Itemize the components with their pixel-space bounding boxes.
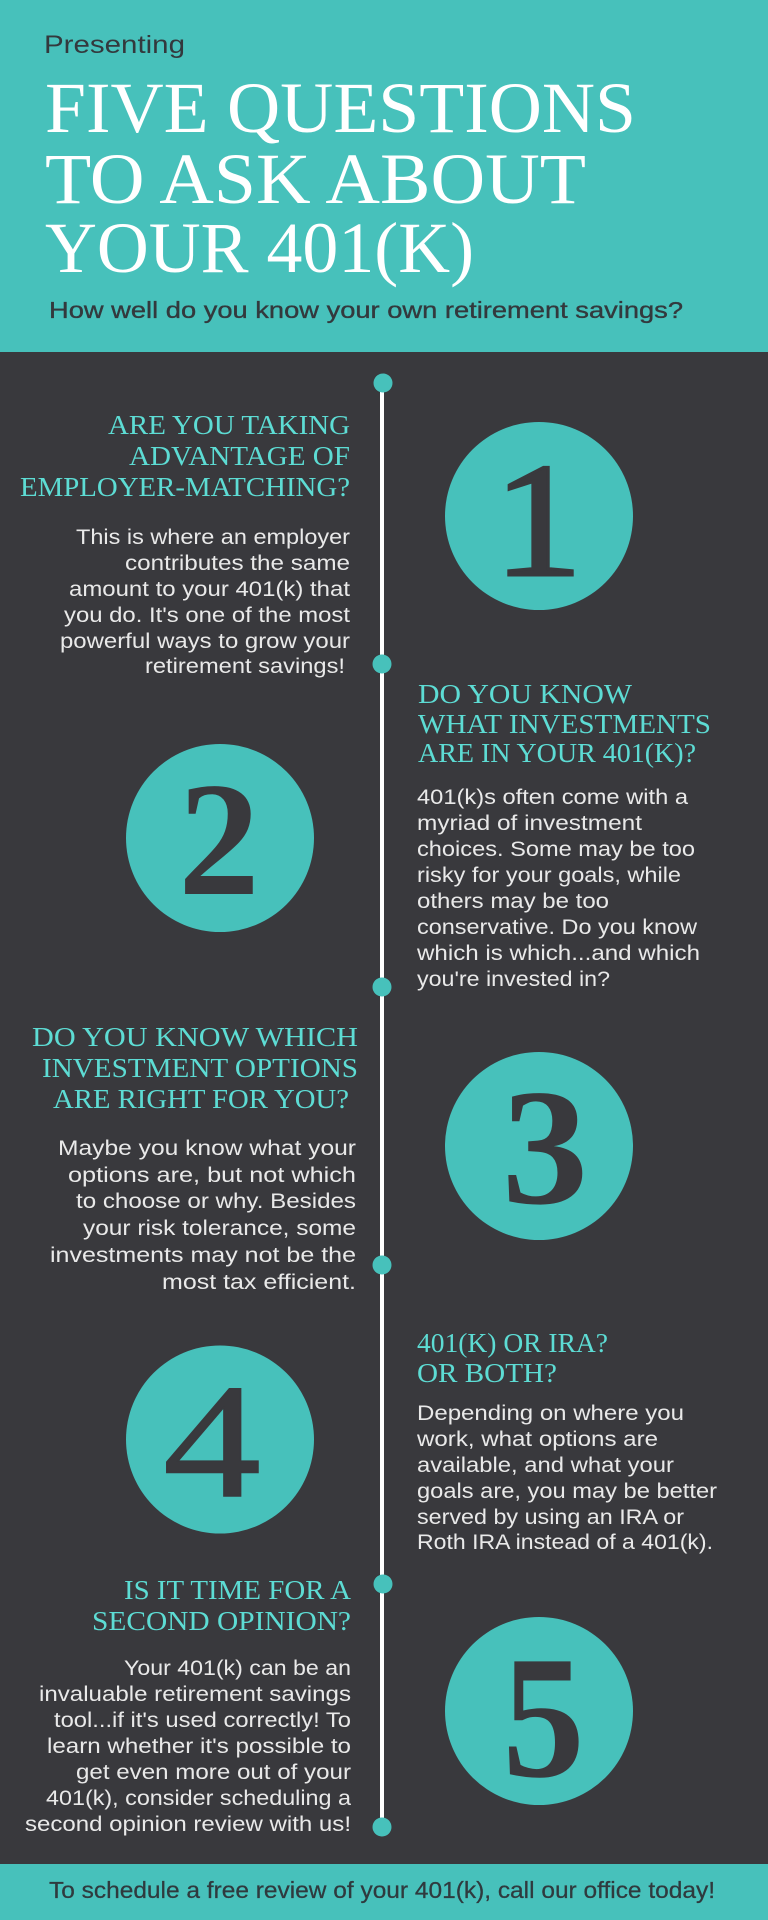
title: FIVE QUESTIONS bbox=[45, 68, 636, 148]
body text: question 4: served by using an IRA or bbox=[417, 1506, 684, 1529]
body text: question 3: investments may not be the bbox=[50, 1244, 356, 1267]
heading: question 1: EMPLOYER-MATCHING? bbox=[20, 472, 350, 502]
body text: question 3 bbox=[50, 1137, 356, 1294]
number badge 1 bbox=[445, 422, 633, 611]
body text: question 2: you're invested in? bbox=[417, 968, 610, 991]
timeline with dots bbox=[372, 374, 392, 1836]
title: TO ASK ABOUT bbox=[45, 139, 586, 219]
number badge 4: 4 bbox=[163, 1351, 261, 1531]
number badge 3: 3 bbox=[502, 1055, 588, 1239]
heading: question 2: DO YOU KNOW bbox=[418, 679, 633, 709]
title: YOUR 401(K) bbox=[45, 208, 474, 288]
body text: question 4: Depending on where you bbox=[417, 1402, 684, 1425]
body text: question 3: most tax efficient. bbox=[162, 1271, 356, 1294]
body text: question 5: get even more out of your bbox=[76, 1761, 351, 1784]
panel: question 5 bbox=[25, 1575, 633, 1836]
heading: question 4 bbox=[417, 1328, 608, 1388]
body text: question 4 bbox=[416, 1402, 717, 1554]
body text: question 2: which is which...and which bbox=[416, 942, 700, 965]
body text: question 4: available, and what your bbox=[417, 1454, 674, 1477]
body text: question 2: 401(k)s often come with a bbox=[417, 786, 688, 809]
body text: question 4: Roth IRA instead of a 401(k). bbox=[417, 1531, 713, 1554]
body text: question 4: work, what options are bbox=[416, 1428, 658, 1451]
panel: footer call to action: To schedule a free review of your 401(k), call our office today! bbox=[49, 1877, 715, 1903]
body text: question 3: your risk tolerance, some bbox=[83, 1217, 356, 1240]
body text: question 1: you do. It's one of the most bbox=[64, 604, 350, 627]
number badge 1: 1 bbox=[493, 430, 583, 611]
heading: question 1: ARE YOU TAKING bbox=[108, 410, 350, 440]
body text: question 1 bbox=[60, 526, 350, 678]
heading: question 3: INVESTMENT OPTIONS bbox=[42, 1053, 358, 1083]
heading: question 1 bbox=[20, 410, 350, 502]
body text: question 3: Maybe you know what your bbox=[58, 1137, 356, 1160]
body text: question 2 bbox=[416, 786, 700, 991]
heading: question 3 bbox=[32, 1022, 358, 1114]
body text: question 5 bbox=[25, 1657, 351, 1836]
heading: question 5: IS IT TIME FOR A bbox=[124, 1575, 352, 1605]
number badge 2: 2 bbox=[178, 750, 260, 930]
panel: question 4 bbox=[126, 1328, 717, 1554]
heading: question 3: DO YOU KNOW WHICH bbox=[32, 1022, 358, 1052]
heading: question 3: ARE RIGHT FOR YOU? bbox=[53, 1084, 349, 1114]
body text: question 5: invaluable retirement savings bbox=[39, 1683, 351, 1706]
body text: question 2: conservative. Do you know bbox=[417, 916, 698, 939]
body text: question 2: risky for your goals, while bbox=[417, 864, 681, 887]
body text: question 1: powerful ways to grow your bbox=[60, 630, 350, 653]
body text: question 2: others may be too bbox=[417, 890, 609, 913]
number badge 3 bbox=[445, 1052, 633, 1240]
body text: question 2: choices. Some may be too bbox=[417, 838, 695, 861]
body text: question 2: myriad of investment bbox=[417, 812, 642, 835]
body text: question 5: second opinion review with us! bbox=[25, 1813, 351, 1836]
subtitle: How well do you know your own retirement savings? bbox=[49, 297, 683, 323]
body text: question 5: 401(k), consider scheduling a bbox=[46, 1787, 351, 1810]
heading: question 2 bbox=[418, 679, 711, 768]
body text: question 3: to choose or why. Besides bbox=[76, 1190, 356, 1213]
heading: question 5 bbox=[92, 1575, 352, 1636]
number badge 4 bbox=[126, 1346, 314, 1534]
heading: question 5: SECOND OPINION? bbox=[92, 1606, 351, 1636]
body text: question 5: learn whether it's possible to bbox=[47, 1735, 351, 1758]
heading: question 2: WHAT INVESTMENTS bbox=[418, 709, 711, 739]
heading: question 2: ARE IN YOUR 401(K)? bbox=[418, 738, 696, 768]
body text: question 5: Your 401(k) can be an bbox=[124, 1657, 351, 1680]
title bbox=[45, 68, 636, 288]
body text: question 4: goals are, you may be better bbox=[417, 1480, 717, 1503]
number badge 5 bbox=[445, 1617, 633, 1814]
heading: question 1: ADVANTAGE OF bbox=[129, 441, 350, 471]
body text: question 5: tool...if it's used correctly! To bbox=[54, 1709, 351, 1732]
body text: question 3: options are, but not which bbox=[68, 1164, 356, 1187]
number badge 5: 5 bbox=[502, 1620, 585, 1814]
panel: header bbox=[0, 0, 768, 352]
panel: dark background bbox=[0, 352, 768, 1864]
body text: question 1: This is where an employer bbox=[76, 526, 350, 549]
panel: footer call to action bbox=[0, 1864, 768, 1920]
number badge 2 bbox=[126, 744, 314, 932]
body text: question 1: contributes the same bbox=[125, 552, 350, 575]
body text: question 1: amount to your 401(k) that bbox=[69, 578, 350, 601]
panel: question 3 bbox=[32, 1022, 633, 1294]
body text: question 1: retirement savings! bbox=[145, 655, 345, 678]
panel: question 2 bbox=[126, 679, 711, 991]
eyebrow: presenting: Presenting bbox=[44, 31, 185, 59]
heading: question 4: 401(K) OR IRA? bbox=[417, 1328, 608, 1358]
panel: question 1 bbox=[20, 410, 633, 678]
heading: question 4: OR BOTH? bbox=[417, 1358, 557, 1388]
